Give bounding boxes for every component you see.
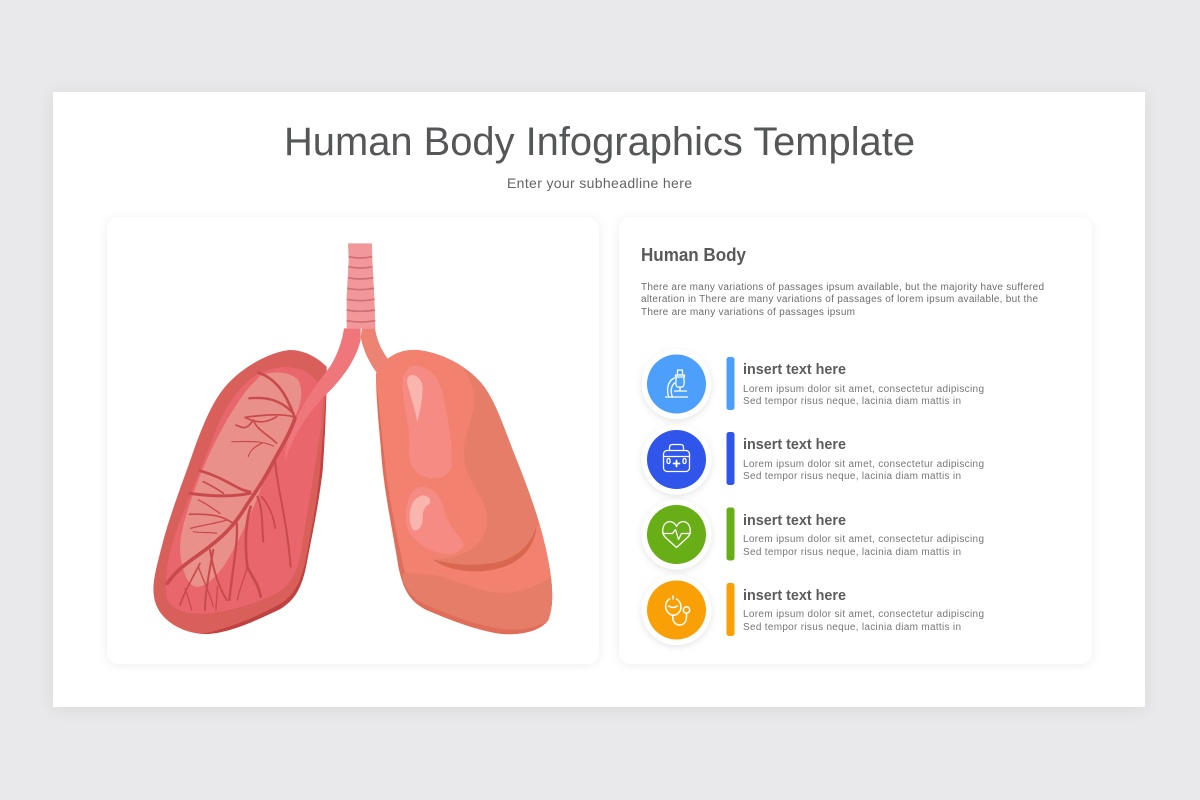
item text: Lorem ipsum dolor sit amet, consectetur adipiscing xyxy=(743,609,984,620)
item text: Lorem ipsum dolor sit amet, consectetur adipiscing xyxy=(743,534,984,545)
item text: Sed tempor risus neque, lacinia diam mattis in xyxy=(743,622,961,633)
illustration: lungs xyxy=(153,243,552,634)
panel paragraph: There are many variations of passages ipsum available, but the majority have suffered xyxy=(641,282,1044,293)
icon: heartbeat xyxy=(642,500,712,570)
item 1: microscope xyxy=(642,349,984,419)
panel paragraph: alteration in There are many variations of passages of lorem ipsum available, but the xyxy=(641,294,1038,305)
panel: lungs illustration xyxy=(107,217,599,664)
item 2: medical kit xyxy=(642,424,984,494)
panel paragraph: There are many variations of passages ipsum xyxy=(641,307,855,318)
item text xyxy=(743,437,984,482)
icon: medical kit xyxy=(642,424,712,494)
panel paragraph xyxy=(641,282,1044,318)
accent bar xyxy=(726,508,734,560)
item text: insert text here xyxy=(743,588,846,604)
right bronchus xyxy=(361,328,389,373)
bottom rim xyxy=(402,582,547,634)
item text xyxy=(743,362,984,407)
panel heading: Human Body xyxy=(641,245,746,265)
bronchial tree xyxy=(167,373,295,610)
left lung xyxy=(153,328,361,663)
lower shaded lobe xyxy=(402,574,552,634)
item text: Sed tempor risus neque, lacinia diam mattis in xyxy=(743,396,961,407)
item text: Lorem ipsum dolor sit amet, consectetur adipiscing xyxy=(743,384,984,395)
title: Human Body Infographics Template xyxy=(284,120,915,164)
accent bar xyxy=(726,432,734,485)
left bronchus xyxy=(285,328,361,461)
lobe fissure xyxy=(433,525,537,571)
icon: stethoscope xyxy=(642,575,712,645)
item text: insert text here xyxy=(743,362,846,378)
item text: insert text here xyxy=(743,513,846,529)
item text: Sed tempor risus neque, lacinia diam mattis in xyxy=(743,547,961,558)
upper shaded lobe xyxy=(434,370,540,564)
right lung xyxy=(360,328,552,634)
item 4: stethoscope xyxy=(642,575,984,645)
accent bar xyxy=(726,583,734,636)
item text xyxy=(743,513,984,558)
slide card xyxy=(53,92,1145,707)
item text: Lorem ipsum dolor sit amet, consectetur adipiscing xyxy=(743,459,984,470)
item text: insert text here xyxy=(743,437,846,453)
trachea xyxy=(347,243,375,328)
accent bar xyxy=(726,357,734,410)
icon: microscope xyxy=(642,349,712,419)
item 3: heart xyxy=(642,500,984,570)
item text: Sed tempor risus neque, lacinia diam mattis in xyxy=(743,471,961,482)
subtitle: Enter your subheadline here xyxy=(507,175,692,191)
item text xyxy=(743,588,984,633)
panel: human body text xyxy=(619,217,1092,664)
